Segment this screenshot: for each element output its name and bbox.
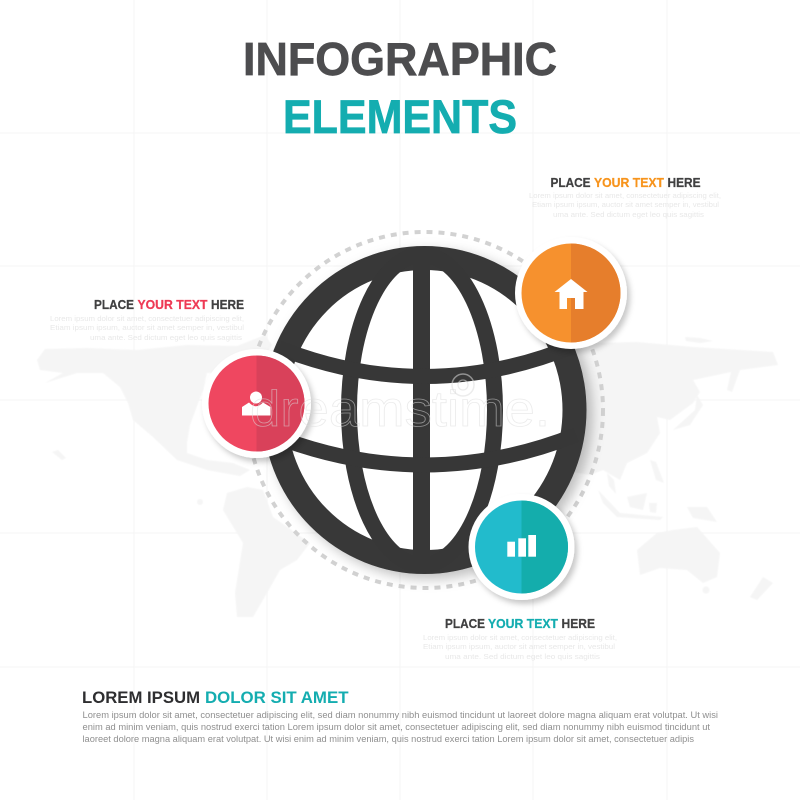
callout: top right: YOUR TEXT: [594, 175, 664, 190]
callout: bottom: Etiam ipsum ipsum, auctor sit amet semper in, vestibul: [423, 642, 615, 651]
callout: bottom: uma ante. Sed dictum eget leo quis sagittis: [445, 652, 600, 661]
callout: left: HERE: [211, 297, 244, 312]
icon: house: [554, 279, 588, 309]
bottom text block: laoreet dolore magna aliquam erat volutpat. Ut wisi enim ad minim veniam, quis nostrud exerci tation Lorem ipsum dolor sit amet, consectetuer adipis: [82, 734, 694, 745]
icon: bar chart: [507, 535, 536, 557]
orange house badge: [515, 237, 627, 349]
title: INFOGRAPHIC: [243, 33, 557, 85]
bottom text block: Lorem ipsum dolor sit amet, consectetuer adipiscing elit, sed diam nonummy nibh euismod tincidunt ut laoreet dolore magna aliquam erat volutpat. Ut wisi: [82, 710, 718, 721]
callout: top right: PLACE: [550, 175, 591, 190]
callout: top right: uma ante. Sed dictum eget leo quis sagittis: [553, 210, 704, 219]
red user badge: [202, 349, 311, 458]
bottom text block: DOLOR SIT AMET: [205, 688, 349, 707]
watermark: dreamstime.: [250, 381, 550, 437]
callout: top right: Lorem ipsum dolor sit amet, consectetuer adipiscing elit,: [529, 191, 721, 200]
callout: left: Lorem ipsum dolor sit amet, consectetuer adipiscing elit,: [50, 314, 244, 323]
title: ELEMENTS: [283, 90, 517, 143]
callout: top right: Etiam ipsum ipsum, auctor sit amet semper in, vestibul: [532, 200, 719, 209]
bottom text block: [82, 688, 718, 745]
callout: left: [50, 297, 244, 342]
callout: bottom: [423, 616, 617, 661]
bottom text block: LOREM IPSUM: [82, 688, 200, 707]
callout: bottom: HERE: [562, 616, 595, 631]
callout: left: YOUR TEXT: [138, 297, 208, 312]
background world map: [37, 335, 778, 617]
callout: left: uma ante. Sed dictum eget leo quis sagittis: [90, 333, 242, 342]
callout: bottom: YOUR TEXT: [488, 616, 558, 631]
teal chart badge: [468, 494, 574, 600]
callout: bottom: PLACE: [445, 616, 485, 631]
bottom text block: enim ad minim veniam, quis nostrud exerci tation Lorem ipsum dolor sit amet, consectetuer adipiscing elit, sed diam nonummy nibh euismod tincidunt ut: [82, 722, 710, 733]
callout: left: PLACE: [94, 297, 134, 312]
dashed orbit ring: [247, 232, 603, 588]
title: [243, 33, 557, 143]
callout: top right: HERE: [668, 175, 701, 190]
callout: bottom: Lorem ipsum dolor sit amet, consectetuer adipiscing elit,: [423, 633, 617, 642]
callout: top right: [529, 175, 721, 219]
icon: user: [242, 392, 270, 416]
callout: left: Etiam ipsum ipsum, auctor sit amet semper in, vestibul: [50, 323, 244, 332]
globe: [272, 255, 576, 565]
